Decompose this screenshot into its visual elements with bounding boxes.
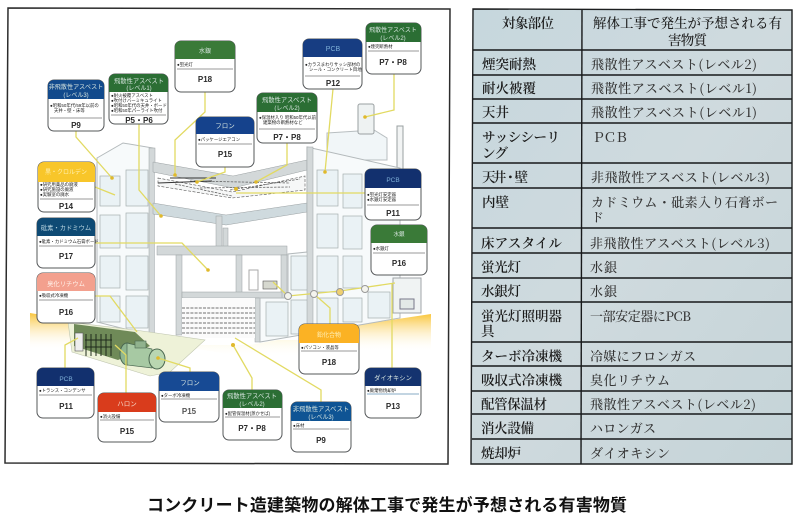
card: dioxin (P13): [365, 368, 421, 418]
card: yellow hazard (P14): ●実験室の廃水: [40, 191, 70, 198]
card: PCB right (P11): ●水銀灯安定器: [367, 196, 397, 203]
card: non-friable asbestos level 3 lower (P9): P9: [316, 436, 326, 445]
card: PCB right (P11): ●蛍光灯安定器: [367, 191, 397, 198]
card: halon (P15): P15: [120, 427, 135, 436]
card: non-friable asbestos level 3 (P9): 非飛散性アスベスト: [49, 83, 103, 91]
table rows: 水銀: [590, 257, 617, 276]
card: friable asbestos level 2 lower (P7-P8): (レベル2): [239, 401, 265, 408]
table header: 対象部位: [502, 12, 554, 32]
table rows: [480, 53, 778, 462]
card: friable asbestos level 2 middle (P7-P8): 建築物の断熱材など: [263, 119, 303, 126]
left tower: [97, 143, 155, 336]
card: mercury right (P16): [371, 225, 427, 275]
card: PCB lower left (P11): [37, 368, 94, 418]
card: yellow hazard (P14): [38, 162, 95, 212]
card: friable asbestos level 2 middle (P7-P8): 飛散性アスベスト: [262, 95, 312, 104]
card: friable asbestos level 2 middle (P7-P8): P7・P8: [273, 133, 301, 142]
table rows: 具: [481, 320, 496, 340]
table rows: 飛散性アスベスト(レベル1): [591, 78, 757, 97]
card: freon lower (P15): [159, 372, 219, 422]
card: PCB upper (P12): ●カラスまわりサッシ部材の: [305, 61, 360, 68]
card: yellow hazard (P14): 黒・クロルデン: [45, 168, 87, 176]
table rows: 冷媒にフロンガス: [590, 346, 696, 365]
table rows: 水銀: [590, 281, 617, 300]
card: halon (P15): ●消火設備: [100, 413, 121, 420]
card: freon upper (P15): [196, 117, 254, 167]
table header: 解体工事で発生が予想される有: [593, 12, 782, 32]
card: PCB upper (P12): シール・コンクリート目地: [309, 66, 362, 73]
table header: [502, 12, 782, 49]
table rows: 蛍光灯照明器: [481, 305, 562, 325]
table rows: 耐火被覆: [482, 77, 536, 97]
table rows: 飛散性アスベスト(レベル1): [591, 102, 757, 121]
card: non-friable asbestos level 3 (P9): P9: [71, 121, 81, 130]
card: arsenic cadmium (P17): P17: [59, 252, 74, 261]
card: friable asbestos level 1 (P5-P6): [109, 74, 168, 125]
table rows: 飛散性アスベスト(レベル2): [590, 394, 756, 413]
card: friable asbestos level 1 (P5-P6): ●昭和50年パーライト吹付: [111, 107, 163, 114]
card: PCB lower left (P11): PCB: [59, 376, 73, 383]
card: friable asbestos level 2 middle (P7-P8): [257, 93, 317, 143]
table header: 害物質: [668, 29, 708, 49]
table rows: ダイオキシン: [590, 443, 670, 462]
table rows: 飛散性アスベスト(レベル2): [591, 54, 757, 73]
card: halon (P15): ハロン: [117, 401, 137, 408]
card: environmental (P18): ●パソコン・液晶等: [301, 344, 339, 351]
card: environmental (P18): 鉛化合物: [317, 331, 341, 339]
table rows: 水銀灯: [481, 280, 522, 300]
card: non-friable asbestos level 3 lower (P9): 非飛散性アスベスト: [293, 404, 349, 413]
card: friable asbestos level 2 lower (P7-P8): 飛散性アスベスト: [227, 391, 277, 400]
table rows: 消火設備: [481, 417, 534, 437]
card: dioxin (P13): ダイオキシン: [374, 373, 412, 382]
table rows: ＰＣＢ: [592, 127, 628, 146]
table rows: 一部安定器にPCB: [590, 306, 691, 325]
card: mercury right (P16): P16: [392, 259, 407, 268]
card: friable asbestos level 2 middle (P7-P8): ●保温材入り 昭和50年代以前: [259, 114, 317, 121]
card: friable asbestos level 2 middle (P7-P8): (レベル2): [274, 105, 300, 112]
card: arsenic cadmium (P17): ●砒素・カドミウム石膏ボード: [39, 238, 99, 245]
card: lithium bromide (P16): ●吸収式冷凍機: [39, 292, 69, 299]
card: friable asbestos level 2 lower (P7-P8): ●配管保温材(蒸かせば): [225, 410, 271, 417]
card: mercury top (P18): [175, 41, 235, 92]
card: friable asbestos level 2 chimney (P7-P8): 飛散性アスベスト: [369, 26, 417, 34]
card: environmental (P18): [299, 324, 359, 374]
card: PCB upper (P12): [303, 39, 362, 89]
table rows: 非飛散性アスベスト(レベル3): [591, 167, 770, 186]
card: yellow hazard (P14): P14: [59, 202, 74, 211]
callout leader lines: [65, 74, 395, 402]
card: lithium bromide (P16): [37, 273, 95, 323]
card: freon lower (P15): フロン: [180, 379, 200, 387]
card: PCB right (P11): PCB: [386, 177, 400, 184]
central floors: [153, 160, 308, 342]
card: arsenic cadmium (P17): 砒素・カドミウム: [41, 223, 91, 232]
panel: building diagram: [5, 8, 450, 464]
card: environmental (P18): P18: [322, 358, 337, 367]
card: non-friable asbestos level 3 lower (P9): ●床材: [293, 422, 305, 429]
card: PCB upper (P12): PCB: [326, 46, 341, 53]
table rows: ターボ冷凍機: [481, 345, 562, 365]
card: mercury top (P18): P18: [198, 75, 213, 84]
title caption: コンクリート造建築物の解体工事で発生が予想される有害物質: [147, 495, 627, 515]
table rows: 蛍光灯: [481, 256, 522, 276]
card: yellow hazard (P14): ●研究施設の廃液: [40, 186, 74, 193]
card: PCB right (P11): P11: [386, 209, 400, 218]
card: yellow hazard (P14): ●研究用薬品の廃液: [40, 181, 78, 188]
table rows: 内壁: [482, 191, 510, 211]
card: friable asbestos level 1 (P5-P6): ●吹付けバーミキュライト: [111, 97, 162, 104]
card: friable asbestos level 2 chimney (P7-P8): ●煙突断熱材: [368, 43, 393, 50]
card: mercury right (P16): 水銀: [393, 230, 405, 238]
card: lithium bromide (P16): 臭化リチウム: [47, 279, 85, 288]
card: dioxin (P13): ●廃棄物焼却炉: [367, 387, 397, 394]
card: non-friable asbestos level 3 (P9): 天井・壁・床等: [54, 107, 85, 114]
table: parts and hazardous substances: [471, 9, 792, 464]
card: dioxin (P13): P13: [386, 402, 401, 411]
card: PCB right (P11): [365, 169, 421, 220]
card: freon lower (P15): P15: [182, 407, 197, 416]
card: halon (P15): [98, 393, 156, 442]
table rows: 非飛散性アスベスト(レベル3): [590, 233, 770, 252]
card: freon lower (P15): ●ターボ冷凍機: [161, 392, 191, 399]
table rows: カドミウム・砒素入り石膏ボー: [591, 192, 778, 211]
table rows: 配管保温材: [481, 393, 548, 413]
card: friable asbestos level 1 (P5-P6): (レベル1): [126, 85, 152, 92]
card: mercury top (P18): 水銀: [199, 47, 211, 55]
card: friable asbestos level 1 (P5-P6): P5・P6: [125, 116, 153, 125]
table rows: サッシシーリ: [482, 126, 560, 146]
table rows: 天井・壁: [482, 166, 528, 186]
table rows: ング: [482, 142, 508, 162]
basement equipment: [68, 322, 205, 376]
card: freon upper (P15): P15: [218, 150, 233, 159]
table rows: 焼却炉: [480, 442, 522, 462]
table rows: ド: [591, 207, 604, 226]
card: friable asbestos level 1 (P5-P6): 飛散性アスベスト: [114, 76, 164, 85]
card: friable asbestos level 2 lower (P7-P8): [223, 390, 282, 440]
card: friable asbestos level 1 (P5-P6): ●昭和50年代の天井・ボード: [111, 102, 167, 109]
card: freon upper (P15): ●パッケージエアコン: [198, 136, 241, 143]
card: PCB lower left (P11): P11: [59, 402, 73, 411]
table rows: 床アスタイル: [481, 232, 562, 252]
card: PCB lower left (P11): ●トランス・コンデンサ: [39, 387, 86, 394]
card: non-friable asbestos level 3 (P9): (レベル3): [63, 92, 89, 99]
card: friable asbestos level 2 lower (P7-P8): P7・P8: [238, 424, 266, 433]
card: friable asbestos level 1 (P5-P6): ●耐火被覆アスベスト: [111, 92, 153, 99]
card: non-friable asbestos level 3 (P9): [48, 80, 104, 131]
table rows: 臭化リチウム: [590, 370, 670, 389]
table rows: 吸収式冷凍機: [481, 369, 562, 389]
ground shading: [30, 313, 431, 358]
card: friable asbestos level 2 chimney (P7-P8): (レベル2): [380, 35, 406, 42]
card: freon upper (P15): フロン: [215, 122, 235, 130]
card: friable asbestos level 2 chimney (P7-P8): P7・P8: [379, 58, 407, 67]
card: PCB upper (P12): P12: [326, 79, 341, 88]
building structure: [68, 104, 421, 376]
table rows: ハロンガス: [590, 418, 656, 437]
right tower: [260, 104, 421, 342]
card: non-friable asbestos level 3 lower (P9): (レベル3): [308, 414, 334, 421]
card: arsenic cadmium (P17): [37, 218, 99, 268]
card: mercury top (P18): ●蛍光灯: [177, 61, 193, 68]
card: mercury right (P16): ●水銀灯: [373, 245, 389, 252]
card: non-friable asbestos level 3 lower (P9): [291, 402, 351, 452]
table rows: 煙突耐熱: [481, 53, 536, 73]
card: friable asbestos level 2 chimney (P7-P8): [366, 23, 421, 74]
card: non-friable asbestos level 3 (P9): ●昭和50年代/59年以前の: [50, 102, 99, 109]
card: lithium bromide (P16): P16: [59, 308, 74, 317]
table rows: 天井: [482, 101, 510, 121]
callout end points: [110, 115, 368, 360]
